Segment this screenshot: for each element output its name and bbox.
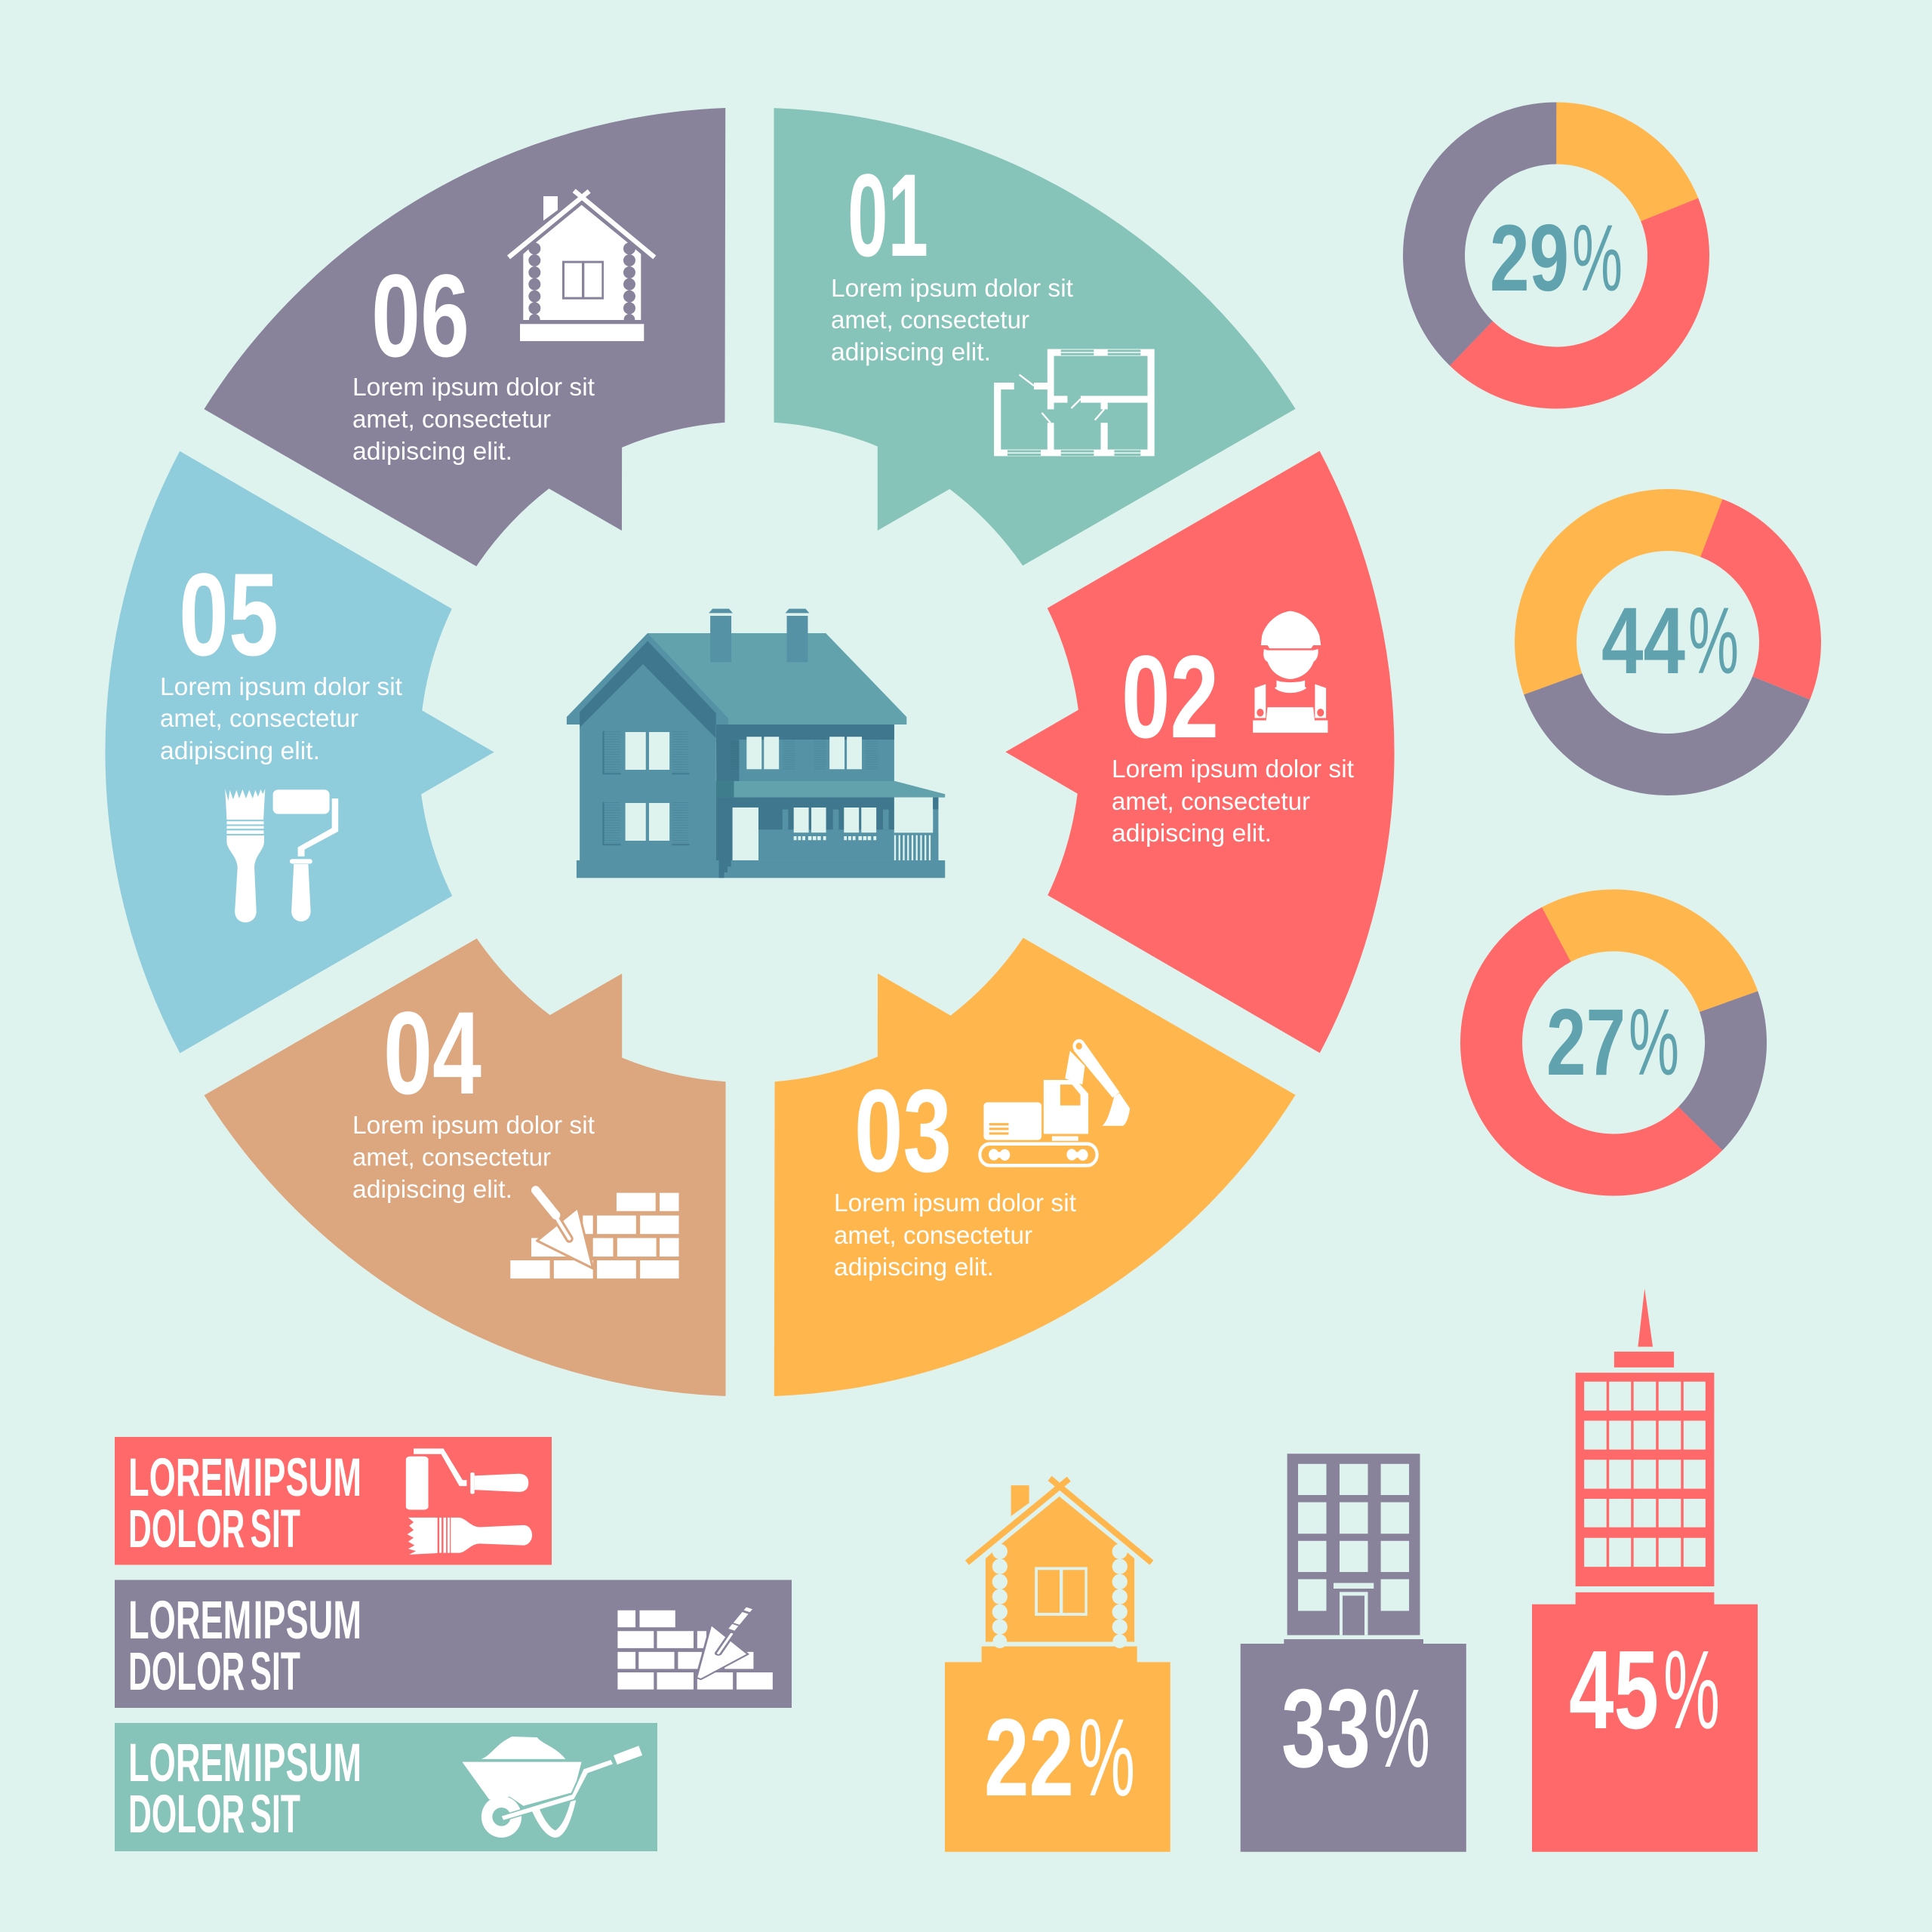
- panel 02 number: 02: [1121, 632, 1219, 763]
- donut value: %: [1629, 990, 1679, 1095]
- icon: skyscraper: [1576, 1288, 1714, 1586]
- donut value: %: [1688, 589, 1739, 694]
- panel 02 text: adipiscing elit.: [1112, 819, 1272, 847]
- panel 04: bricks: [204, 939, 726, 1396]
- panel 03 shape: [638, 866, 1296, 1546]
- stat value: %: [1663, 1628, 1720, 1752]
- panel 05 shape: [0, 373, 577, 1053]
- panel 04 text: adipiscing elit.: [352, 1175, 512, 1203]
- bar heading: LOREM IPSUM: [128, 1734, 361, 1793]
- donut value: 27: [1546, 990, 1626, 1095]
- stat column: office 33%: [1241, 1454, 1466, 1852]
- panel 02 shape: [923, 451, 1580, 1131]
- donut segments: [1383, 82, 1729, 429]
- bar heading: DOLOR SIT: [128, 1785, 300, 1844]
- stat value: %: [1078, 1696, 1135, 1819]
- bar heading: LOREM IPSUM: [128, 1448, 361, 1508]
- bar background: [115, 1580, 792, 1708]
- bar heading: DOLOR SIT: [128, 1642, 300, 1702]
- stat column: skyscraper 45%: [1532, 1288, 1758, 1852]
- panel 05 text: amet, consectetur: [160, 704, 358, 732]
- stat value: 33: [1281, 1666, 1371, 1791]
- donut value: 44: [1601, 589, 1685, 694]
- panel 03: excavator: [638, 866, 1296, 1546]
- bar background: [115, 1437, 552, 1565]
- panel 06 text: adipiscing elit.: [352, 437, 512, 465]
- stat value: 45: [1569, 1628, 1659, 1752]
- panel 03 text: Lorem ipsum dolor sit: [834, 1189, 1076, 1217]
- panel 06 text: amet, consectetur: [352, 405, 551, 433]
- icon: worker: [1253, 611, 1327, 733]
- panel 01 shape: [774, 108, 1295, 566]
- panel 02 text: [1112, 755, 1354, 847]
- panel 04 text: [352, 1111, 595, 1203]
- icon: roller and brush: [406, 1448, 532, 1555]
- panel 05 text: adipiscing elit.: [160, 737, 320, 764]
- label bar: purple, bricks: [115, 1580, 792, 1708]
- panel 02 text: Lorem ipsum dolor sit: [1112, 755, 1354, 783]
- donut segments: [1441, 869, 1786, 1216]
- stat block: [1532, 1592, 1758, 1852]
- stat block: [1241, 1639, 1466, 1852]
- panel 04 text: Lorem ipsum dolor sit: [352, 1111, 595, 1139]
- panel 01 text: Lorem ipsum dolor sit: [831, 274, 1073, 302]
- icon: log house: [509, 191, 654, 341]
- panel 06: log house: [204, 0, 861, 638]
- panel 04 shape: [204, 939, 726, 1396]
- stat column: log house 22%: [945, 1478, 1171, 1852]
- panel 01 text: amet, consectetur: [831, 306, 1029, 334]
- panel 01 text: adipiscing elit.: [831, 338, 991, 365]
- panel 06 shape: [204, 0, 861, 638]
- panel 06 text: [352, 373, 595, 465]
- bar heading: LOREM IPSUM: [128, 1591, 361, 1651]
- panel 03 number: 03: [854, 1066, 952, 1197]
- panel 03 text: adipiscing elit.: [834, 1253, 994, 1281]
- icon: bricks and trowel: [510, 1190, 679, 1278]
- bar heading: [128, 1591, 361, 1702]
- panel 01 number: 01: [848, 150, 928, 281]
- donut chart 29%: [1383, 82, 1729, 429]
- panel 05 number: 05: [179, 549, 278, 681]
- label bar: teal, wheelbarrow: [115, 1723, 657, 1851]
- stat value: %: [1374, 1666, 1430, 1791]
- icon: floor plan: [994, 349, 1155, 456]
- panel 04 text: amet, consectetur: [352, 1143, 551, 1171]
- panel 03 text: amet, consectetur: [834, 1221, 1032, 1249]
- label bar: red, painting: [115, 1437, 552, 1565]
- panel 05: paint tools: [0, 373, 577, 1053]
- panel 06 text: Lorem ipsum dolor sit: [352, 373, 595, 401]
- panel 05 text: Lorem ipsum dolor sit: [160, 672, 402, 700]
- donut value: 29: [1490, 206, 1569, 311]
- icon: bricks and trowel: [617, 1606, 773, 1690]
- donut segments: [1509, 483, 1827, 801]
- icon: excavator: [980, 1039, 1130, 1165]
- donut chart 44%: [1509, 483, 1827, 801]
- icon: log house: [967, 1478, 1152, 1648]
- bar heading: [128, 1448, 361, 1559]
- panel 03 text: [834, 1189, 1076, 1281]
- icon: brush and roller: [225, 789, 338, 922]
- bar background: [115, 1723, 657, 1851]
- icon: wheelbarrow: [462, 1737, 642, 1838]
- panel 01 text: [831, 274, 1073, 365]
- panel 01: floor plan: [774, 108, 1295, 566]
- panel 02 text: amet, consectetur: [1112, 787, 1310, 815]
- bar heading: DOLOR SIT: [128, 1500, 300, 1559]
- stat value: 22: [984, 1696, 1074, 1819]
- icon: office building: [1287, 1454, 1420, 1635]
- panel 04 number: 04: [383, 988, 481, 1119]
- bar heading: [128, 1734, 361, 1844]
- panel 02: worker: [923, 451, 1580, 1131]
- panel 05 text: [160, 672, 402, 764]
- donut value: %: [1572, 206, 1623, 311]
- center house illustration: [567, 609, 945, 878]
- stat block: [945, 1647, 1171, 1852]
- panel 06 number: 06: [371, 251, 469, 382]
- donut chart 27%: [1441, 869, 1786, 1216]
